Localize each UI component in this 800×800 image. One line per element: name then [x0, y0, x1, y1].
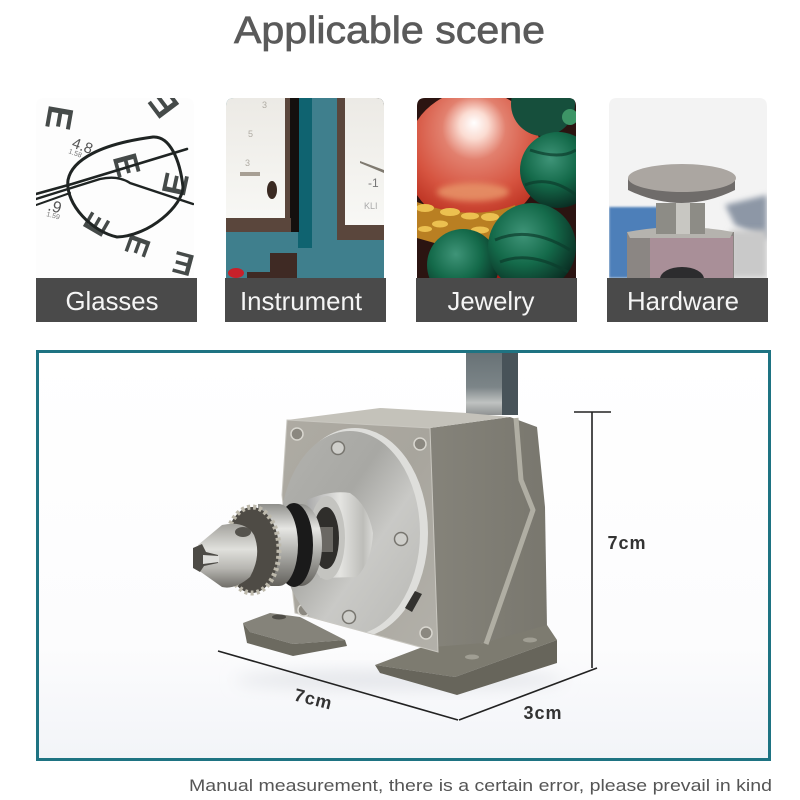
- photo: eye chart with glasses: E: [37, 103, 82, 133]
- label: depth 3cm: 3cm: [523, 703, 563, 723]
- housing top: [287, 408, 510, 428]
- panel: jewelry scene: [416, 98, 577, 322]
- panel: instrument scene: [225, 98, 386, 322]
- round flange: [280, 428, 428, 638]
- boss: [307, 492, 373, 580]
- label bar: Instrument: Instrument: [240, 286, 363, 316]
- label bar: Hardware: [607, 278, 768, 322]
- photo: eye chart with glasses: E: [76, 207, 117, 242]
- label: width 7cm: 7cm: [292, 685, 335, 714]
- flange screws: [332, 442, 408, 624]
- title: Applicable scene: [234, 10, 545, 52]
- shadow: [235, 670, 565, 690]
- label bar: Glasses: [36, 278, 197, 322]
- chuck gear: [225, 507, 279, 593]
- panel: hardware scene: [607, 98, 768, 322]
- photo: eye chart with glasses: E: [140, 82, 187, 126]
- photo: analog gauges on a teal wall: 5: [248, 129, 253, 139]
- caption: Manual measurement, there is a certain error, please prevail in kind: [189, 776, 772, 795]
- label: height 7cm: 7cm: [607, 533, 647, 553]
- photo: eye chart with glasses: E: [118, 230, 158, 262]
- photo: eye chart with glasses: 4.8: [70, 135, 95, 158]
- photo: eye chart with glasses: E: [169, 244, 198, 283]
- photo: analog gauges on a teal wall: -1: [368, 176, 379, 190]
- photo: analog gauges on a teal wall: 3: [245, 158, 250, 168]
- panel: product dimensions frame: [38, 352, 770, 760]
- photo: analog gauges on a teal wall: KLI: [364, 201, 378, 211]
- label bar: Hardware: Hardware: [627, 286, 739, 316]
- dimension: depth line: [459, 668, 597, 720]
- photo: analog gauges on a teal wall: 3: [262, 100, 267, 110]
- photo: red pearl, gold chain and malachite beads: [417, 98, 576, 278]
- photo: eye chart with glasses: E: [155, 169, 197, 199]
- front plate: [282, 420, 438, 652]
- label bar: Jewelry: Jewelry: [448, 286, 534, 316]
- corner bolts: [291, 428, 432, 639]
- housing rib: [486, 418, 533, 644]
- label bar: Instrument: [225, 278, 386, 322]
- photo: eye chart with glasses: [36, 98, 194, 276]
- chuck collar: [258, 503, 322, 587]
- photo: eye chart with glasses: 1.58: [67, 148, 83, 160]
- product: mini drill motor with chuck: [193, 353, 565, 695]
- left foot: [243, 613, 347, 656]
- photo: eye chart with glasses: .9: [46, 197, 63, 217]
- output shaft bracket: [466, 353, 518, 415]
- label bar: Glasses: Glasses: [66, 286, 158, 316]
- motor housing side: [430, 417, 547, 652]
- photo: analog gauges on a teal wall: [226, 98, 384, 278]
- photo: machined metal screw: [609, 98, 767, 291]
- right foot: [375, 625, 557, 695]
- dimension: width line: [218, 651, 458, 720]
- photo: eye chart with glasses: 1.59: [45, 211, 61, 221]
- photo: eye chart with glasses: E: [105, 149, 147, 181]
- panel: glasses scene: [36, 82, 198, 322]
- dimension: height line: [574, 412, 611, 668]
- chuck nose: [193, 524, 257, 588]
- label bar: Jewelry: [416, 278, 577, 322]
